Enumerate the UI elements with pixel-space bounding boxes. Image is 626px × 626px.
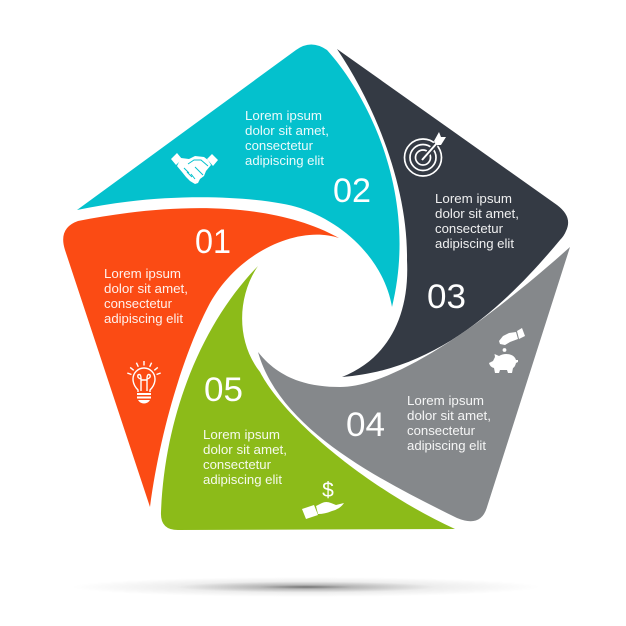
icon: handshake [171,153,218,184]
text: block 01: dolor sit amet, [104,281,188,296]
text: block 02 [245,108,329,168]
text: block 02: adipiscing elit [245,153,324,168]
number 03: 03 [427,278,466,316]
text: block 04: Lorem ipsum [407,393,484,408]
panel 03: dark segment [337,49,568,377]
text: block 05: consectetur [203,457,272,472]
text: block 04: adipiscing elit [407,438,486,453]
text: block 02: Lorem ipsum [245,108,322,123]
text: block 01 [104,266,188,326]
number 02: 02 [333,172,371,210]
icon: light bulb [127,361,161,404]
text: block 02: consectetur [245,138,314,153]
text: block 04: dolor sit amet, [407,408,491,423]
panel 05: green segment [161,266,455,530]
ground shadow [71,577,541,597]
text: block 05 [203,427,287,487]
text: block 03: dolor sit amet, [435,206,519,221]
icon: dollar sign over open hand: $ [322,479,334,502]
text: block 01: consectetur [104,296,173,311]
text: block 03: consectetur [435,221,504,236]
text: block 03: Lorem ipsum [435,191,512,206]
panel 01: red segment [63,208,339,507]
text: block 04 [407,393,491,453]
text: block 03 [435,191,519,251]
text: block 03: adipiscing elit [435,236,514,251]
text: block 05: Lorem ipsum [203,427,280,442]
panel 04: gray segment [258,247,570,521]
text: block 04: consectetur [407,423,476,438]
icon: dollar sign over open hand [302,479,344,519]
panel 02: teal segment [77,44,400,307]
number 05: 05 [204,371,243,409]
text: block 05: adipiscing elit [203,472,282,487]
icon: piggy bank with coin [489,328,525,373]
number 01: 01 [195,223,231,261]
text: block 01: Lorem ipsum [104,266,181,281]
text: block 05: dolor sit amet, [203,442,287,457]
text: block 01: adipiscing elit [104,311,183,326]
text: block 02: dolor sit amet, [245,123,329,138]
icon: target with arrow [404,132,446,176]
number 04: 04 [346,406,385,444]
